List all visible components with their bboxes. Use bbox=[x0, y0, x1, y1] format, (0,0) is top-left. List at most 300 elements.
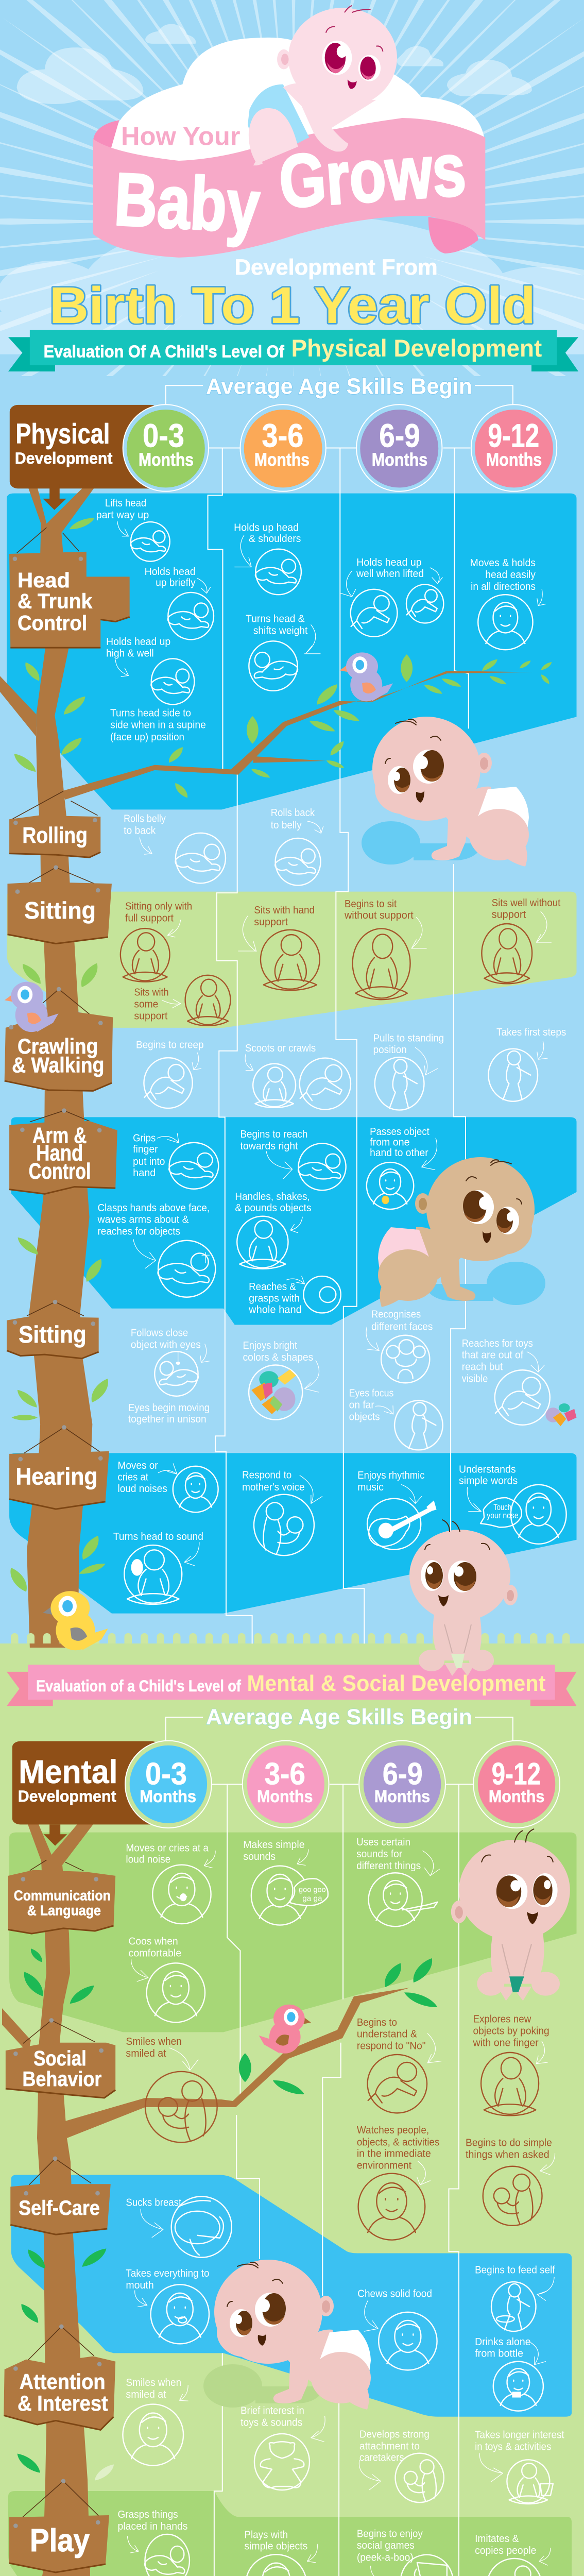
crawling baby: pink with white diaper bbox=[362, 717, 529, 867]
ribbon: physical development: Evaluation Of A Child's Level Of bbox=[44, 342, 284, 361]
sign: self-care bbox=[10, 2156, 111, 2234]
age column dividers: mental bbox=[211, 1784, 473, 2576]
skill: chews solid food bbox=[357, 2288, 437, 2370]
ribbon: physical development bbox=[8, 330, 578, 371]
mental development box bbox=[12, 1741, 160, 1824]
sign: head and trunk control: Control bbox=[18, 611, 87, 635]
circle: 3-6 months: Months bbox=[257, 1787, 313, 1806]
skill: eyes focus on far objects: on far bbox=[349, 1399, 374, 1411]
fence: sky section bbox=[11, 1633, 572, 1643]
skill: recognises different faces: Recognises bbox=[371, 1309, 421, 1320]
skill: passes object from one hand to other: Passes object bbox=[370, 1126, 430, 1138]
circle: 3-6 months: Months bbox=[254, 450, 310, 470]
skill: makes simple sounds: ga ga bbox=[302, 1894, 322, 1903]
skill: passes object from one hand to other: hand to other bbox=[370, 1147, 428, 1159]
blue panel: arm and hand control bbox=[11, 1117, 577, 1325]
heading: average age skills begin (mental) bbox=[166, 1705, 513, 1750]
skill: grips finger put into hand: Grips bbox=[133, 1132, 156, 1144]
skill: moves or cries at loud noises: Moves or bbox=[118, 1460, 158, 1471]
sign: communication and language bbox=[8, 1860, 115, 1934]
skill: sucks breast bbox=[126, 2196, 232, 2258]
skill: takes first steps bbox=[488, 1026, 566, 1101]
skill: holds head up well when lifted bbox=[341, 556, 443, 637]
sign: arm and hand control: Control bbox=[29, 1159, 91, 1184]
skill: drinks alone from bottle bbox=[475, 2336, 545, 2411]
skill: holds head up briefly: up briefly bbox=[156, 577, 196, 589]
skill: watches people objects activities: Watches people, bbox=[357, 2124, 429, 2136]
skill: enjoys bright colors and shapes: colors & shapes bbox=[243, 1351, 313, 1363]
skill: sucks breast: Sucks breast bbox=[126, 2197, 181, 2209]
skill: drinks alone from bottle: Drinks alone bbox=[475, 2336, 531, 2348]
bird: pink on lower branch bbox=[259, 2005, 311, 2054]
sign: head and trunk control: Head bbox=[18, 568, 70, 592]
skill: passes object from one hand to other: from one bbox=[370, 1137, 410, 1148]
green panel: sitting bbox=[7, 892, 577, 1028]
circle: 0-3 months: Months bbox=[139, 450, 194, 470]
skill: holds head up high and well: Holds head up bbox=[106, 636, 170, 648]
skill: plays with simple objects bbox=[244, 2529, 317, 2576]
green panel: communication and language bbox=[9, 1833, 577, 2032]
skill: sitting only with full support: Sitting only with bbox=[125, 900, 192, 912]
skill: develops strong attachment to caretakers: Develops strong bbox=[359, 2429, 430, 2441]
skill: follows close object with eyes: object with eyes bbox=[131, 1338, 201, 1350]
skill: lifts head part way up bbox=[96, 497, 170, 562]
skill: explores new objects by poking: with one finger bbox=[473, 2037, 539, 2048]
sign: arm and hand control bbox=[9, 1108, 117, 1194]
skill: imitates and copies people bbox=[475, 2533, 551, 2576]
sign: social behavior: Behavior bbox=[22, 2067, 101, 2091]
skill: clasps hands above face bbox=[97, 1202, 215, 1297]
skill: understands simple words: simple words bbox=[459, 1475, 518, 1487]
sign: arm and hand control: Arm & bbox=[32, 1123, 87, 1148]
row: watches people, self-care, attention bbox=[4, 2124, 564, 2504]
skill: begins to understand no bbox=[357, 2016, 441, 2113]
sign: crawling and walking bbox=[5, 987, 113, 1091]
skill: enjoys rhythmic music: music bbox=[357, 1481, 384, 1493]
subtitle: Birth To 1 Year Old: Birth To 1 Year Old bbox=[49, 277, 536, 334]
skill: turns head to sound bbox=[113, 1531, 203, 1604]
skill: reaches for toys out of reach: that are out of bbox=[462, 1349, 523, 1361]
bird: purple on sign bbox=[5, 982, 59, 1032]
skill: begins to reach towards right: towards right bbox=[240, 1140, 298, 1152]
sign: sitting: Sitting bbox=[24, 897, 96, 924]
skill: rolls back to belly bbox=[271, 807, 323, 885]
skill: rolls back to belly: Rolls back bbox=[271, 807, 315, 819]
skill: uses certain sounds for different things: different things bbox=[356, 1860, 421, 1872]
skill: explores new objects by poking: Explores new bbox=[473, 2013, 531, 2025]
skill: moves and holds head easily bbox=[470, 557, 545, 650]
skill: uses certain sounds for different things: sounds for bbox=[356, 1848, 402, 1860]
skill: moves or cries at a loud noise: Moves or cries at a bbox=[126, 1842, 209, 1854]
skill: smiles when smiled at: Smiles when bbox=[126, 2036, 182, 2047]
skill: holds up head and shoulders: Holds up head bbox=[234, 522, 299, 534]
skill: understands simple words: Understands bbox=[459, 1464, 516, 1476]
circle: 9-12 months: Months bbox=[489, 1787, 544, 1806]
sign: attention and interest: & Interest bbox=[18, 2392, 108, 2415]
pink banner: How Your bbox=[121, 122, 240, 151]
circle: 6-9 months: Months bbox=[372, 450, 427, 470]
skill: coos when comfortable: Coos when bbox=[129, 1936, 178, 1947]
skill: clasps hands above face: reaches for objects bbox=[97, 1225, 180, 1237]
circle: 6-9 months bbox=[359, 1741, 445, 1828]
skill: holds up head and shoulders: & shoulders bbox=[249, 533, 301, 545]
skill: begins to enjoy social games: Begins to enjoy bbox=[357, 2528, 423, 2539]
sign: communication and language: Communication bbox=[14, 1888, 111, 1904]
skill: turns head and shifts weight: Turns head & bbox=[246, 613, 305, 625]
sign: play: Play bbox=[30, 2523, 90, 2558]
circle: 6-9 months: 6-9 bbox=[379, 417, 420, 454]
skill: sits with some support: Sits with bbox=[134, 987, 169, 998]
skill: sits with some support: some bbox=[134, 998, 158, 1010]
skill: rolls belly to back: to back bbox=[124, 824, 156, 836]
mental development box: Mental bbox=[19, 1753, 118, 1790]
skill: sits with hand support: support bbox=[254, 916, 288, 928]
sitting baby legs over ribbon bbox=[419, 1650, 494, 1676]
skill: handles shakes pounds objects bbox=[235, 1191, 312, 1269]
leaves: lower tree bbox=[6, 1947, 440, 2576]
hero background bbox=[0, 0, 584, 376]
skill: reaches for toys out of reach: visible bbox=[462, 1373, 488, 1385]
skill: smiles when smiled at (attention): Smiles when bbox=[126, 2377, 181, 2388]
skill: drinks alone from bottle: from bottle bbox=[475, 2348, 523, 2359]
skill: reaches for toys out of reach bbox=[462, 1337, 577, 1426]
circle: 9-12 months bbox=[473, 1741, 560, 1828]
skill: turns head and shifts weight: shifts weight bbox=[253, 625, 307, 637]
circle: 9-12 months bbox=[471, 404, 557, 492]
skill: reaches and grasps with whole hand: grasps with bbox=[249, 1293, 300, 1304]
skill: understands simple words: Touch bbox=[493, 1503, 511, 1512]
sign: crawling and walking: & Walking bbox=[12, 1053, 104, 1077]
skill: clasps hands above face: waves arms about & bbox=[97, 1214, 189, 1225]
skill: uses certain sounds for different things: Uses certain bbox=[356, 1836, 410, 1848]
hero baby bbox=[248, 6, 397, 165]
skill: scoots or crawls: Scoots or crawls bbox=[245, 1042, 316, 1054]
physical development box: Physical bbox=[15, 418, 110, 449]
circle: 0-3 months: 0-3 bbox=[143, 417, 184, 454]
skill: grips finger put into hand bbox=[133, 1132, 218, 1189]
blue panel: head and trunk control bbox=[7, 494, 577, 809]
skill: moves or cries at loud noises: loud noises bbox=[118, 1483, 167, 1495]
skill: watches people objects activities: objects, & activities bbox=[357, 2136, 439, 2148]
skill: coos when comfortable: comfortable bbox=[129, 1947, 181, 1959]
circle: 6-9 months: 6-9 bbox=[383, 1756, 423, 1791]
circle: 9-12 months: 9-12 bbox=[488, 417, 539, 454]
sitting baby: physical section bbox=[409, 1520, 518, 1676]
circle: 9-12 months: Months bbox=[486, 450, 542, 470]
white cloud behind baby bbox=[111, 38, 484, 162]
row: head and trunk control bbox=[9, 484, 545, 885]
skill: plays with simple objects: simple objects bbox=[244, 2540, 307, 2552]
crawling baby: pink on self-care panel bbox=[203, 2260, 371, 2410]
skill: begins to understand no: Begins to bbox=[357, 2016, 397, 2028]
skill: follows close object with eyes bbox=[131, 1327, 209, 1396]
skill: brief interest in toys and sounds: toys & sounds bbox=[241, 2417, 302, 2429]
skill: sits well without support: support bbox=[492, 909, 526, 921]
skill: grasps things placed in hands: placed in hands bbox=[118, 2520, 187, 2532]
skill: reaches for toys out of reach: reach but bbox=[462, 1361, 503, 1373]
arrow: physical box to signs bbox=[43, 484, 66, 510]
skill: moves and holds head easily: Moves & holds bbox=[470, 557, 536, 569]
skill: understands simple words: your nose bbox=[487, 1511, 519, 1520]
sign: crawling and walking: Crawling bbox=[18, 1034, 98, 1058]
bird: purple on branch bbox=[340, 652, 393, 701]
skill: grips finger put into hand: finger bbox=[133, 1143, 158, 1155]
skill: moves and holds head easily: in all directions bbox=[471, 581, 536, 592]
skill: smiles when smiled at (attention): smiled at bbox=[126, 2388, 166, 2400]
skill: holds head up high and well: high & well bbox=[106, 648, 154, 659]
skill: makes simple sounds: Makes simple bbox=[243, 1839, 305, 1851]
skill: eyes focus on far objects: objects bbox=[349, 1411, 380, 1423]
skill: turns head side to side bbox=[110, 707, 206, 743]
pink banner bbox=[93, 118, 485, 258]
skill: eyes focus on far objects: Eyes focus bbox=[349, 1387, 393, 1399]
row: seeing and hearing bbox=[7, 1300, 577, 1604]
skill: grasps things placed in hands bbox=[118, 2509, 190, 2576]
arrow: mental box to signs bbox=[44, 1824, 67, 1846]
skill: takes everything to mouth: mouth bbox=[126, 2279, 154, 2291]
skill: begins to creep bbox=[136, 1039, 204, 1108]
skill: holds up head and shoulders bbox=[234, 522, 301, 595]
crawling baby: tan with pink diaper bbox=[378, 1157, 545, 1307]
background: grass bbox=[0, 1643, 584, 2576]
heading: average age skills begin (physical) bbox=[166, 375, 513, 406]
sitting baby: teal diaper bbox=[451, 1829, 570, 2001]
skill: respond to mother's voice: Respond to bbox=[242, 1469, 291, 1481]
skill: lifts head part way up: Lifts head bbox=[105, 497, 146, 509]
skill: takes everything to mouth: Takes everything to bbox=[126, 2267, 209, 2279]
skill: holds head up briefly bbox=[145, 566, 214, 639]
title: How Your Baby Grows bbox=[93, 38, 485, 258]
sign: rolling bbox=[9, 791, 100, 857]
header: physical development box and month circles bbox=[10, 404, 557, 492]
skill: makes simple sounds bbox=[243, 1839, 328, 1925]
sign: hearing: Hearing bbox=[15, 1463, 97, 1489]
skill: respond to mother's voice: mother's voice bbox=[242, 1481, 305, 1493]
skill: understands simple words bbox=[459, 1464, 566, 1544]
skill: eyes begin moving together: together in unison bbox=[128, 1413, 207, 1425]
background: sky bbox=[0, 0, 584, 1643]
sign: social behavior bbox=[6, 2018, 115, 2098]
skill: grips finger put into hand: put into bbox=[133, 1156, 165, 1167]
skill: explores new objects by poking bbox=[473, 2013, 549, 2115]
skill: moves or cries at loud noises: cries at bbox=[118, 1471, 148, 1483]
skill: plays with simple objects: Plays with bbox=[244, 2529, 288, 2540]
skill: smiles when smiled at (attention) bbox=[123, 2377, 188, 2466]
circle: 0-3 months bbox=[123, 404, 209, 492]
skill: begins to sit without support bbox=[344, 898, 426, 999]
skill: moves and holds head easily: head easily bbox=[485, 569, 536, 581]
skill: develops strong attachment to caretakers bbox=[359, 2429, 444, 2502]
mental development box: Development bbox=[18, 1787, 116, 1805]
skill: pulls to standing position bbox=[373, 1032, 444, 1110]
skill: smiles when smiled at bbox=[126, 2036, 217, 2142]
skill: develops strong attachment to caretakers: attachment to bbox=[359, 2441, 420, 2452]
skill: turns head side to side: side when in a supine bbox=[110, 719, 206, 731]
circle: 6-9 months: Months bbox=[374, 1787, 430, 1806]
sign: self-care: Self-Care bbox=[19, 2197, 100, 2219]
sign: rolling: Rolling bbox=[22, 823, 88, 848]
ribbon: mental and social development: Evaluation of a Child's Level of bbox=[36, 1677, 241, 1695]
skill: begins to understand no: respond to "No" bbox=[357, 2040, 426, 2052]
skill: begins to feed self bbox=[475, 2264, 555, 2331]
skill: enjoys rhythmic music bbox=[357, 1469, 437, 1550]
skill: sits with hand support: Sits with hand bbox=[254, 904, 315, 916]
skill: begins to enjoy social games: (peek-a-boo) bbox=[357, 2551, 414, 2563]
circle: 0-3 months: Months bbox=[140, 1787, 196, 1806]
tree: lower trunk bbox=[2, 1824, 410, 2576]
heading: average age skills begin (physical): Average Age Skills Begin bbox=[206, 375, 472, 399]
skill: holds head up high and well bbox=[106, 636, 194, 704]
age column dividers: physical bbox=[208, 448, 469, 1643]
circle: 3-6 months: 3-6 bbox=[262, 417, 303, 454]
skill: sitting only with full support bbox=[121, 900, 192, 982]
branch with bird perch bbox=[61, 671, 533, 800]
skill: holds head up well when lifted: Holds head up bbox=[356, 556, 422, 568]
subtitle: Birth To 1 Year Old bbox=[49, 255, 536, 334]
skill: sitting only with full support: full support bbox=[125, 912, 174, 924]
sign: hearing bbox=[9, 1425, 109, 1509]
circle: 6-9 months bbox=[356, 404, 442, 492]
skill: imitates and copies people: Imitates & bbox=[475, 2533, 519, 2545]
blue panel: hearing bbox=[9, 1453, 577, 1614]
skill: pulls to standing position: Pulls to standing bbox=[373, 1032, 444, 1044]
skill: handles shakes pounds objects: Handles, shakes, bbox=[235, 1191, 310, 1202]
skill: reaches and grasps with whole hand: Reaches & bbox=[249, 1281, 296, 1293]
skill: brief interest in toys and sounds bbox=[241, 2405, 325, 2490]
skill: takes longer interest in toys bbox=[475, 2429, 564, 2504]
skill: follows close object with eyes: Follows close bbox=[131, 1327, 188, 1338]
physical development box bbox=[10, 405, 159, 488]
skill: passes object from one hand to other bbox=[367, 1126, 437, 1209]
skill: sits with some support bbox=[134, 975, 230, 1026]
skill: clasps hands above face: Clasps hands above face, bbox=[97, 1202, 210, 1214]
skill: respond to mother's voice bbox=[242, 1469, 322, 1555]
skill: rolls back to belly: to belly bbox=[271, 819, 302, 831]
skill: holds head up well when lifted: well when lifted bbox=[356, 568, 424, 580]
subtitle: Birth To 1 Year Old: Development From bbox=[235, 255, 438, 279]
skill: turns head and shifts weight bbox=[246, 613, 320, 691]
skill: turns head to sound: Turns head to sound bbox=[113, 1531, 203, 1543]
small clouds bbox=[17, 24, 532, 104]
skill: eyes begin moving together: Eyes begin moving bbox=[128, 1402, 210, 1414]
skill: begins to enjoy social games: social games bbox=[357, 2539, 415, 2551]
skill: enjoys rhythmic music: Enjoys rhythmic bbox=[357, 1469, 424, 1481]
skill: moves or cries at loud noises bbox=[118, 1460, 218, 1512]
skill: reaches and grasps with whole hand bbox=[248, 1276, 341, 1315]
skill: grasps things placed in hands: Grasps things bbox=[118, 2509, 178, 2520]
skill: enjoys bright colors and shapes: Enjoys bright bbox=[243, 1340, 297, 1351]
sign: play bbox=[9, 2479, 109, 2572]
row: communication and social behaviour bbox=[6, 1824, 549, 2142]
skill: watches people objects activities bbox=[357, 2124, 439, 2240]
skill: chews solid food: Chews solid food bbox=[357, 2288, 432, 2300]
circle: 9-12 months: 9-12 bbox=[492, 1756, 541, 1791]
green panel: play bbox=[8, 2491, 572, 2576]
skill: makes simple sounds: goo goo bbox=[299, 1885, 326, 1894]
row: play (upper part) bbox=[118, 2509, 551, 2576]
sun rays bbox=[0, 0, 584, 376]
skill: sits with hand support bbox=[238, 904, 320, 990]
sign: attention and interest: Attention bbox=[20, 2370, 106, 2394]
skill: imitates and copies people: copies people bbox=[475, 2545, 536, 2556]
skill: smiles when smiled at: smiled at bbox=[126, 2047, 166, 2059]
skill: enjoys bright colors and shapes bbox=[243, 1340, 319, 1420]
Grows: Grows bbox=[277, 127, 468, 224]
skill: moves or cries at a loud noise: loud noise bbox=[126, 1853, 170, 1865]
skill: coos when comfortable bbox=[129, 1936, 205, 2022]
skill: brief interest in toys and sounds: Brief interest in bbox=[241, 2405, 304, 2417]
skill: sits with some support: support bbox=[134, 1010, 167, 1022]
skill: begins to reach towards right: Begins to reach bbox=[240, 1128, 307, 1140]
sign: arm and hand control: Hand bbox=[36, 1141, 83, 1165]
skill: develops strong attachment to caretakers: caretakers bbox=[359, 2452, 404, 2463]
skill: eyes begin moving together bbox=[128, 1402, 210, 1425]
skill: begins to do simple things when asked bbox=[466, 2137, 555, 2226]
skill: begins to enjoy social games bbox=[357, 2528, 453, 2576]
skill: rolls belly to back: Rolls belly bbox=[124, 812, 166, 824]
skill: lifts head part way up: part way up bbox=[96, 509, 149, 521]
Baby: Baby bbox=[112, 157, 262, 248]
circle: 0-3 months: 0-3 bbox=[145, 1756, 187, 1791]
skill: rolls belly to back bbox=[124, 812, 226, 883]
skill: uses certain sounds for different things bbox=[356, 1836, 439, 1926]
sign: communication and language: & Language bbox=[27, 1903, 101, 1919]
sign: social behavior: Social bbox=[33, 2046, 87, 2070]
skill: holds head up briefly: Holds head bbox=[145, 566, 196, 578]
skill: turns head side to side: Turns head side to bbox=[110, 707, 191, 719]
sign: sitting (vision): Sitting bbox=[19, 1321, 87, 1348]
skill: begins to sit without support: Begins to sit bbox=[345, 898, 397, 910]
branch with pink bird bbox=[63, 1988, 410, 2138]
sign: sitting (vision) bbox=[7, 1300, 99, 1359]
skill: recognises different faces bbox=[366, 1309, 433, 1383]
skill: watches people objects activities: in the immediate bbox=[357, 2148, 431, 2160]
sign: sitting bbox=[7, 865, 112, 944]
pale lower sky bbox=[0, 214, 584, 361]
circle: 0-3 months bbox=[125, 1741, 212, 1828]
sign: attention and interest bbox=[4, 2324, 115, 2430]
heading: average age skills begin (mental): Average Age Skills Begin bbox=[206, 1705, 472, 1730]
skill: moves or cries at a loud noise bbox=[126, 1842, 215, 1924]
leaves: upper tree bbox=[6, 515, 554, 1594]
skill: scoots or crawls bbox=[245, 1042, 351, 1110]
circle: 3-6 months bbox=[240, 404, 326, 492]
skill: turns head side to side: (face up) position bbox=[110, 731, 184, 743]
skill: eyes focus on far objects bbox=[349, 1387, 443, 1450]
skill: reaches for toys out of reach: Reaches for toys bbox=[462, 1337, 533, 1349]
skill: begins to creep: Begins to creep bbox=[136, 1039, 204, 1051]
skill: reaches and grasps with whole hand: whole hand bbox=[248, 1304, 302, 1315]
skill: pulls to standing position: position bbox=[373, 1044, 407, 1056]
skill: begins to reach towards right bbox=[240, 1128, 346, 1190]
skill: grips finger put into hand: hand bbox=[133, 1167, 156, 1179]
sign: head and trunk control bbox=[9, 528, 130, 648]
skill: begins to sit without support: without support bbox=[344, 909, 414, 921]
circle: 3-6 months bbox=[243, 1741, 329, 1828]
skill: watches people objects activities: environment bbox=[357, 2160, 411, 2172]
sign: head and trunk control: & Trunk bbox=[18, 589, 92, 613]
circle: 3-6 months: 3-6 bbox=[264, 1756, 305, 1791]
blue panel: self-care bbox=[11, 2175, 572, 2417]
row: sitting with support, crawling, arm and hand bbox=[5, 865, 566, 1315]
ribbon: mental and social development bbox=[7, 1665, 577, 1706]
tree: upper trunk bbox=[0, 487, 533, 1648]
skill: recognises different faces: different faces bbox=[371, 1321, 433, 1333]
header: mental development box and month circles bbox=[12, 1741, 560, 1828]
skill: sits well without support bbox=[482, 897, 560, 984]
skill: begins to understand no: understand & bbox=[357, 2028, 417, 2040]
bird: yellow by trunk bbox=[43, 1591, 108, 1650]
